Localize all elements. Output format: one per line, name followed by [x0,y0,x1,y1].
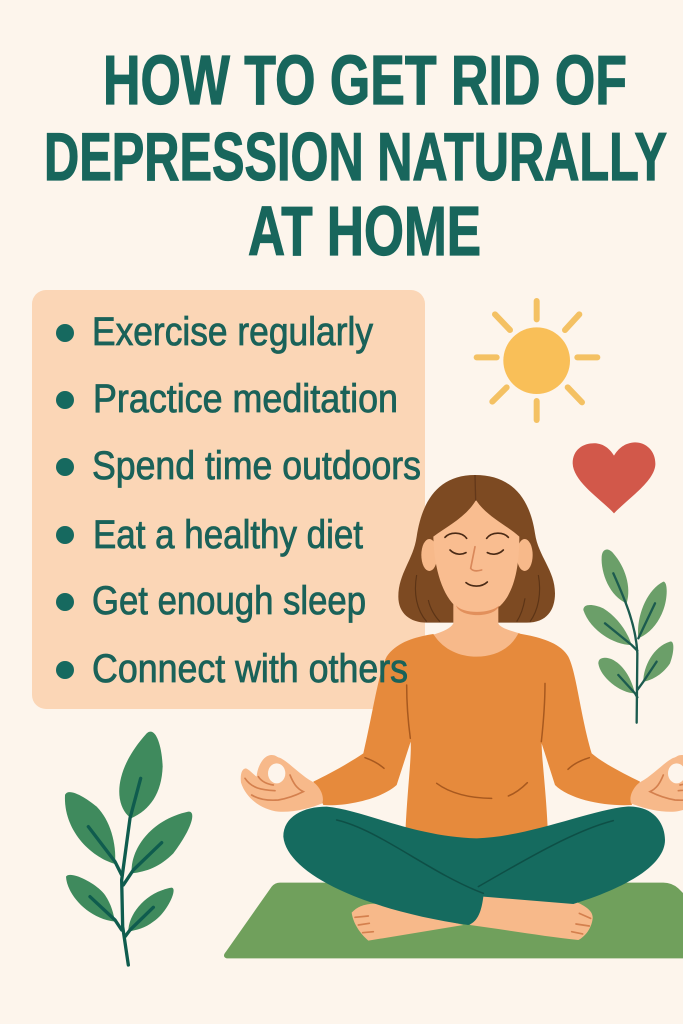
icon: sun [477,301,597,420]
list: tips text: Connect with others [92,647,408,691]
list: tips text: Exercise regularly [92,310,373,354]
hair [398,475,555,623]
left hand [241,755,323,812]
title [44,41,667,270]
icon: heart [573,442,655,513]
title: AT HOME [248,192,481,270]
list: tips text: Spend time outdoors [92,444,421,488]
illustration: meditating woman [224,475,683,958]
sweater [313,633,640,843]
right hand [630,755,683,812]
feet [352,895,593,941]
list: tips text: Get enough sleep [92,579,366,623]
legs [283,807,665,925]
list: tips text [92,310,421,691]
face [415,475,540,622]
panel: tips background [32,290,425,709]
icon: left plant [65,732,192,965]
list: bullets [56,324,74,679]
list: tips text: Practice meditation [93,377,398,421]
icon: right plant [583,550,673,723]
yoga mat [224,883,683,958]
list: tips text: Eat a healthy diet [93,513,363,557]
neck [432,603,520,670]
